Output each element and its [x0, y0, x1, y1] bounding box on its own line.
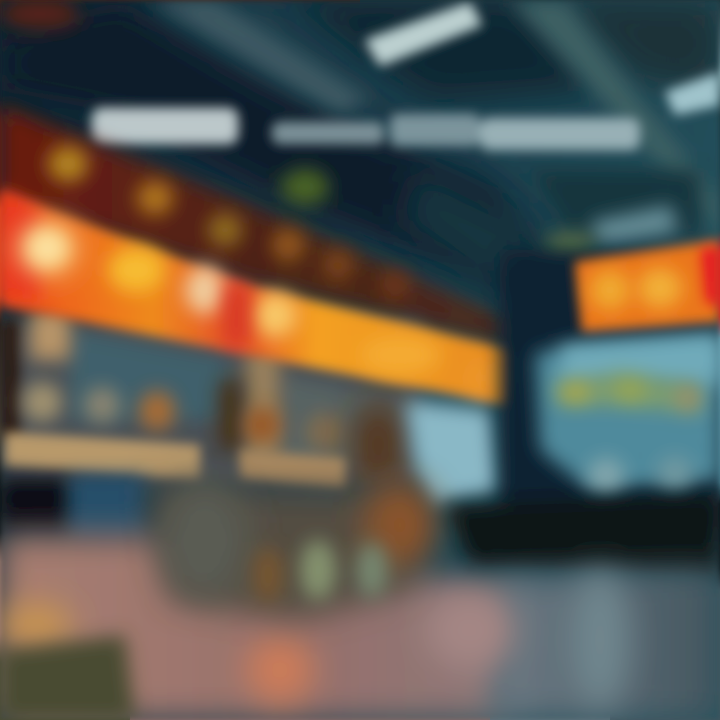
floor — [0, 535, 720, 720]
right orange sign — [575, 240, 720, 332]
counter display — [150, 480, 436, 620]
edge backing right — [360, 0, 720, 720]
edge backing floor left — [130, 640, 490, 720]
ceiling structure — [0, 0, 720, 300]
foreground olive block — [0, 635, 135, 720]
ceiling lights — [281, 2, 720, 255]
dark red upper sign band — [0, 105, 510, 345]
orange glowing sign band — [0, 190, 510, 405]
right wall dark — [500, 250, 720, 530]
storefront wall — [0, 310, 420, 489]
blurred heading — [92, 108, 640, 150]
blue window — [405, 400, 500, 505]
edge backing left — [0, 0, 360, 720]
edge backing floor right — [490, 640, 610, 720]
right screen — [535, 335, 720, 494]
counter shelf — [5, 432, 345, 488]
dark band — [0, 475, 720, 575]
